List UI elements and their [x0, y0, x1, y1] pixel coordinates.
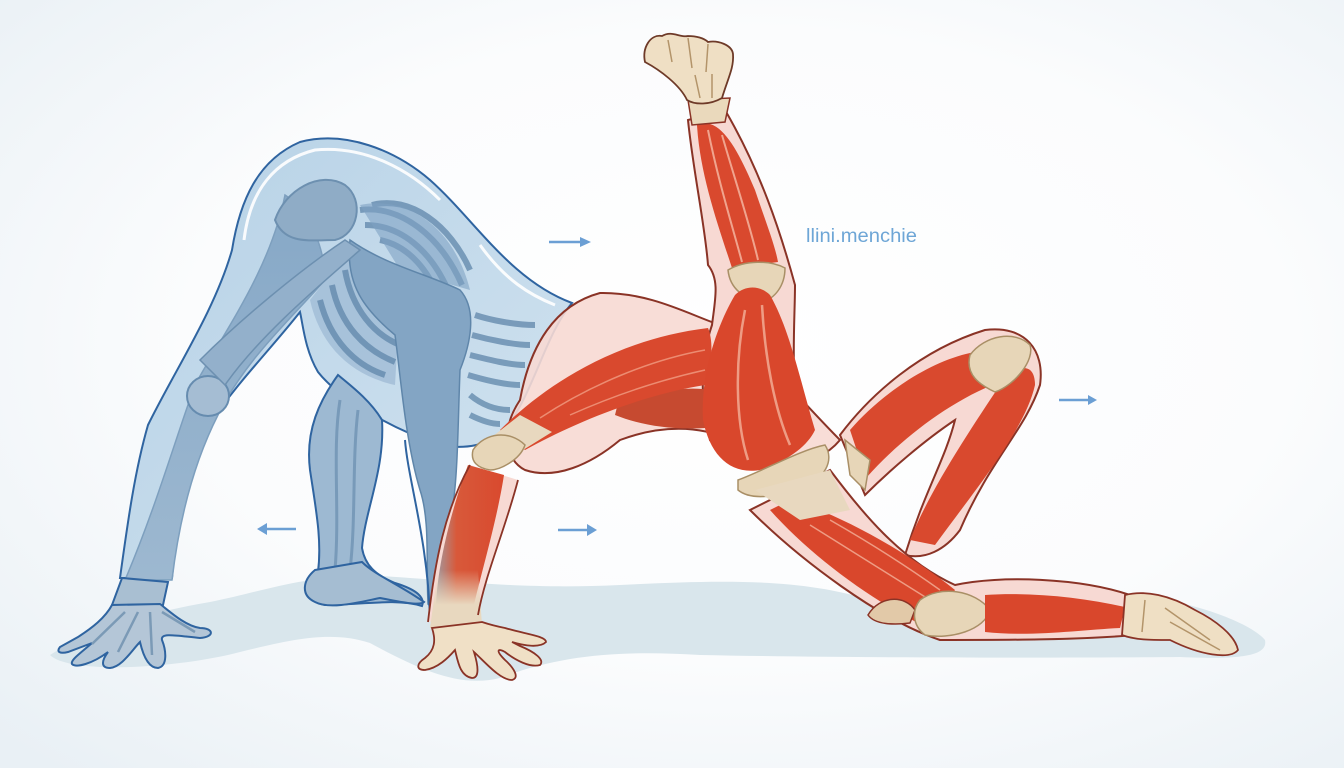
back leg — [308, 375, 423, 606]
elbow joint — [472, 435, 525, 470]
right thigh muscle — [850, 352, 992, 478]
floor shadow — [50, 576, 1265, 681]
upper arm muscle — [500, 328, 711, 450]
large thigh muscle — [703, 288, 815, 471]
raised foot — [644, 34, 733, 104]
near limb — [125, 195, 325, 580]
right calf muscle — [910, 368, 1035, 545]
heel — [868, 599, 915, 624]
arrow: upper left — [549, 237, 591, 247]
right knee joint — [969, 336, 1031, 392]
red figure — [418, 34, 1238, 680]
white inner contour — [244, 149, 555, 305]
forearm muscle — [436, 465, 504, 605]
shoulder and skull — [275, 180, 357, 240]
arm tendon — [488, 415, 552, 455]
muscle streaks — [708, 130, 758, 262]
right leg silhouette — [840, 329, 1041, 556]
red foot — [1122, 593, 1238, 655]
forearm tendon — [430, 570, 482, 628]
lower thigh streaks — [810, 520, 940, 600]
forearm pink — [428, 465, 518, 622]
forearm outline — [428, 465, 518, 622]
blue translucent silhouette — [120, 138, 572, 578]
joint by thigh — [845, 440, 870, 490]
raised forearm muscle — [697, 123, 778, 268]
front limb outline — [405, 440, 430, 620]
thigh streaks — [738, 305, 790, 460]
blue figure — [58, 138, 572, 668]
arrow: right — [1059, 395, 1097, 405]
lower ribcage shade — [310, 255, 400, 385]
knee joint top — [728, 262, 785, 302]
thigh muscle behind — [615, 389, 712, 428]
raised ankle joint — [688, 98, 730, 125]
ribcage — [320, 203, 535, 424]
arrow: lower left — [257, 523, 296, 535]
ankle joint — [915, 591, 990, 636]
spine fan — [360, 203, 470, 290]
back leg bones — [330, 400, 418, 600]
shin muscle — [985, 594, 1125, 634]
lower leg silhouette — [750, 470, 1135, 640]
lower thigh tendon — [755, 470, 850, 520]
foot bone lines — [1142, 600, 1220, 650]
red figure hand — [418, 622, 546, 680]
upper arm streaks — [540, 350, 705, 418]
foot bone lines — [668, 38, 712, 98]
hip silhouette — [507, 293, 840, 473]
label: llini.menchie — [806, 226, 917, 247]
front limb bone — [349, 240, 471, 612]
near wrist — [112, 578, 168, 605]
knee joint — [187, 376, 229, 416]
arrow: lower centre — [558, 524, 597, 536]
central knee joint — [738, 445, 829, 497]
lower thigh muscle — [770, 500, 955, 628]
near hand — [58, 604, 211, 668]
forearm bone — [200, 240, 360, 385]
near foot — [305, 562, 424, 605]
raised limb silhouette — [688, 110, 800, 440]
